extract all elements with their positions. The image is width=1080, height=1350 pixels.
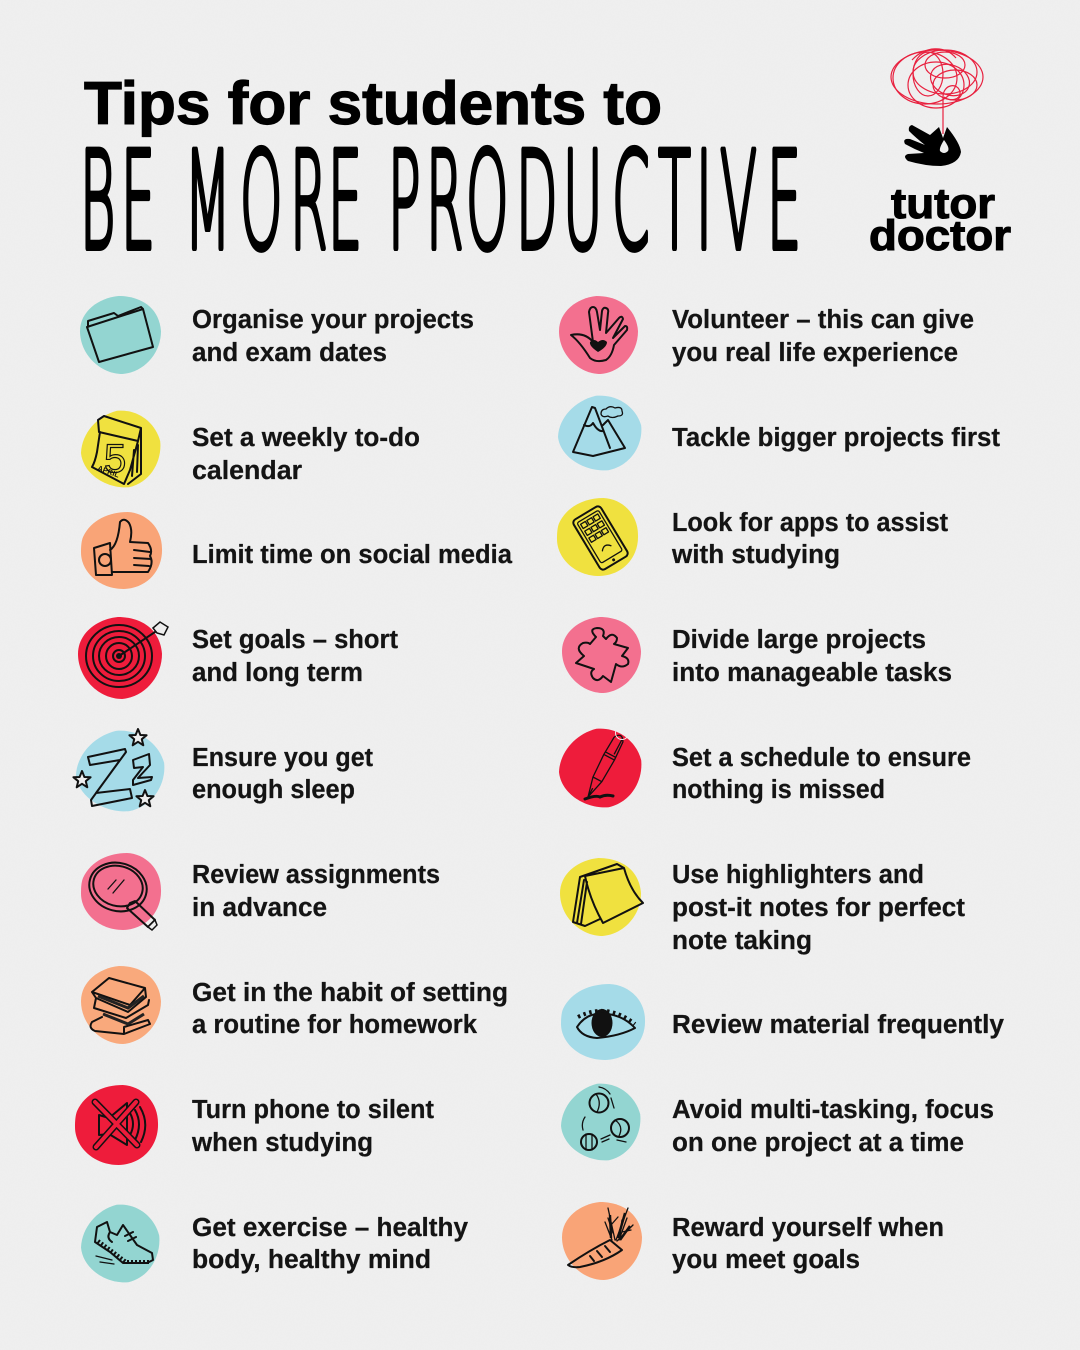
label: note taking bbox=[672, 927, 812, 955]
icon: Zz and stars bbox=[73, 729, 164, 811]
tip: goals bbox=[78, 617, 398, 699]
title bbox=[80, 70, 801, 281]
label: Set a schedule to ensure bbox=[672, 744, 971, 772]
icon: running shoe bbox=[81, 1205, 159, 1282]
label: nothing is missed bbox=[672, 776, 885, 804]
label: Ensure you get bbox=[192, 744, 373, 772]
label bbox=[192, 744, 373, 804]
tip: apps bbox=[557, 498, 948, 576]
icon: drop in hand bbox=[940, 140, 948, 153]
tip: phone silent bbox=[75, 1085, 435, 1165]
label: when studying bbox=[191, 1129, 373, 1157]
label bbox=[672, 861, 966, 955]
label: Get in the habit of setting bbox=[192, 979, 508, 1007]
tip: divide bbox=[562, 617, 952, 693]
label: Organise your projects bbox=[192, 306, 474, 334]
tip: avoid multi-tasking bbox=[561, 1084, 994, 1160]
label: and long term bbox=[192, 659, 363, 687]
icon: tear-off calendar: APRIL bbox=[96, 463, 121, 480]
label: Volunteer – this can give bbox=[672, 306, 974, 334]
logo: tutor doctor bbox=[869, 49, 1011, 260]
title line 2: BE MORE PRODUCTIVE bbox=[80, 125, 801, 281]
icon: target with arrow bbox=[78, 617, 168, 699]
tip: social media bbox=[81, 512, 513, 589]
label: calendar bbox=[192, 457, 302, 485]
label: you meet goals bbox=[672, 1246, 860, 1274]
label bbox=[672, 1096, 994, 1157]
icon: puzzle piece bbox=[562, 617, 641, 693]
tip: volunteer bbox=[559, 296, 974, 374]
icon: mountains and cloud bbox=[558, 396, 641, 470]
label bbox=[192, 306, 474, 367]
logo wordmark: doctor bbox=[869, 212, 1011, 260]
tip: schedule bbox=[559, 726, 971, 807]
icon: tear-off calendar bbox=[81, 411, 160, 487]
icon: stack of books bbox=[81, 966, 161, 1044]
label: you real life experience bbox=[672, 339, 958, 367]
icon: eye bbox=[561, 984, 645, 1060]
label: Limit time on social media bbox=[192, 541, 513, 569]
icon: carrot bbox=[562, 1202, 642, 1280]
title line 1: Tips for students to bbox=[84, 70, 662, 137]
label: Divide large projects bbox=[672, 626, 926, 654]
label bbox=[192, 626, 398, 687]
label: Set goals – short bbox=[192, 626, 398, 654]
label: body, healthy mind bbox=[192, 1246, 431, 1274]
icon: magnifying glass bbox=[81, 853, 161, 930]
tip: review material bbox=[561, 984, 1005, 1060]
tip: reward bbox=[562, 1202, 944, 1280]
icon: tear-off calendar: 5 bbox=[104, 437, 126, 481]
label: Review assignments bbox=[192, 861, 440, 889]
label bbox=[672, 306, 974, 367]
tip: calendar bbox=[81, 411, 420, 487]
label: Reward yourself when bbox=[672, 1214, 944, 1242]
tip: sleep bbox=[73, 729, 373, 811]
label bbox=[192, 424, 420, 485]
label: Avoid multi-tasking, focus bbox=[672, 1096, 994, 1124]
icon: red scribble brain bbox=[891, 49, 983, 134]
tip: routine bbox=[81, 966, 508, 1044]
icon: smartphone bbox=[557, 498, 638, 576]
label: in advance bbox=[192, 894, 327, 922]
label: Review material frequently bbox=[672, 1011, 1005, 1039]
label bbox=[191, 1096, 435, 1157]
logo wordmark bbox=[869, 180, 1011, 260]
tip: assignments bbox=[81, 853, 440, 930]
label bbox=[672, 626, 952, 687]
icon: thumbs up bbox=[81, 512, 162, 589]
label: Use highlighters and bbox=[672, 861, 924, 889]
tip: exercise bbox=[81, 1205, 469, 1282]
label bbox=[192, 979, 508, 1039]
label: a routine for homework bbox=[192, 1011, 478, 1039]
label: on one project at a time bbox=[672, 1129, 964, 1157]
label: Tackle bigger projects first bbox=[672, 424, 1001, 452]
icon: juggling balls bbox=[561, 1084, 640, 1160]
label: and exam dates bbox=[192, 339, 387, 367]
label bbox=[192, 861, 440, 922]
label bbox=[192, 1214, 469, 1274]
logo wordmark: tutor bbox=[891, 180, 995, 228]
icon: folder bbox=[80, 296, 161, 374]
label bbox=[672, 744, 971, 804]
icon: fountain pen bbox=[559, 726, 641, 807]
tip: bigger projects bbox=[558, 396, 1001, 470]
label: into manageable tasks bbox=[672, 659, 952, 687]
label: with studying bbox=[671, 541, 840, 569]
label: Set a weekly to-do bbox=[192, 424, 420, 452]
tip: organise bbox=[80, 296, 474, 374]
icon: sticky notes bbox=[560, 858, 643, 936]
tip: highlighters bbox=[560, 858, 966, 955]
icon: hand with heart bbox=[559, 296, 638, 374]
icon: muted speaker bbox=[75, 1085, 158, 1165]
label bbox=[671, 509, 948, 569]
label: Get exercise – healthy bbox=[192, 1214, 469, 1242]
label: enough sleep bbox=[192, 776, 355, 804]
label bbox=[672, 1214, 944, 1274]
label: post-it notes for perfect bbox=[672, 894, 966, 922]
label: Turn phone to silent bbox=[192, 1096, 435, 1124]
label: Look for apps to assist bbox=[672, 509, 948, 537]
icon: black hand bbox=[904, 125, 961, 166]
